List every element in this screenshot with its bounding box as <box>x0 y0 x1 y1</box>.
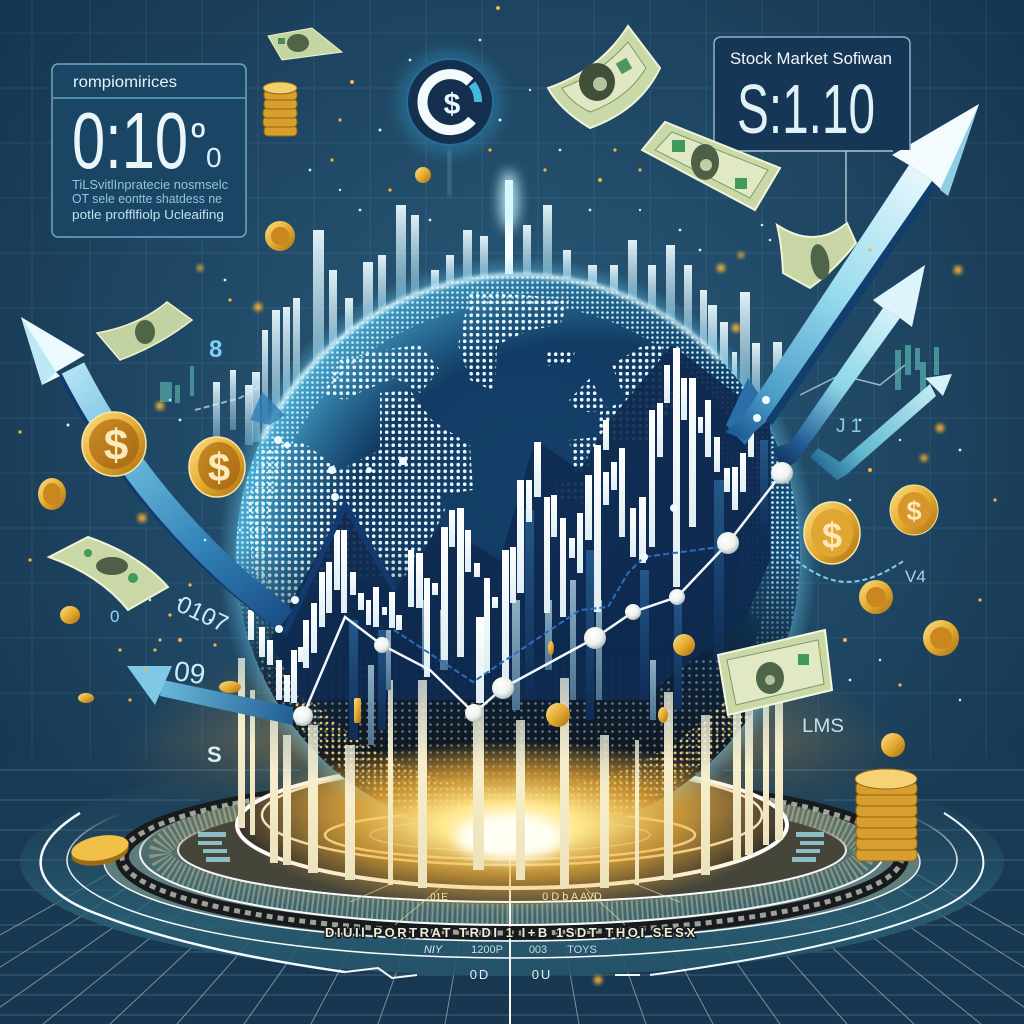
bill 4 <box>777 223 856 288</box>
arrow: large right <box>725 104 979 440</box>
small coins <box>60 167 905 757</box>
arrow: second right <box>772 265 925 470</box>
floor spark <box>594 976 602 984</box>
panel body text: TiLSvitlInpratecie nosmselc <box>72 178 228 192</box>
coin 2: $ <box>208 446 230 490</box>
left figure: 8 <box>209 336 222 363</box>
coin 4 <box>265 221 295 251</box>
globe rim dots <box>236 274 800 838</box>
arrow: third right <box>810 374 952 480</box>
coin 1 left large: $ <box>104 421 128 470</box>
coin 8 <box>859 580 893 614</box>
globe left crescent <box>236 274 800 838</box>
globe rim light <box>262 275 720 440</box>
globe lower gold dots <box>285 695 751 838</box>
small zero: 0 <box>206 142 222 173</box>
code label: 003 <box>529 944 547 956</box>
metric value: 0:10 <box>72 96 188 185</box>
chart backdrop <box>270 345 770 700</box>
continents <box>248 292 795 620</box>
icon: circular logo <box>396 48 504 196</box>
bill 5 left <box>97 302 192 360</box>
back bar chart <box>213 180 782 445</box>
left code one: 0107 <box>172 591 232 638</box>
right label: V4 <box>905 567 926 586</box>
logo beam <box>448 150 451 196</box>
scale value right: 0U <box>532 967 552 982</box>
coin 1 left large <box>82 412 146 476</box>
left background mini chart <box>160 366 262 410</box>
bill 6 left lower <box>49 537 168 610</box>
navy candlesticks <box>349 440 768 740</box>
panel: stock market software <box>714 37 910 222</box>
coin 6: $ <box>906 496 922 526</box>
bill 7 lower right <box>718 630 832 715</box>
data points <box>293 462 793 726</box>
coin 5 right large <box>804 502 860 564</box>
coin 5 right large: $ <box>822 515 842 556</box>
platform ring labels <box>325 891 695 982</box>
degree mark: o <box>191 113 205 143</box>
bill 1 top small <box>268 28 342 60</box>
coin 2 <box>189 437 245 497</box>
arrow: lower left <box>127 666 293 725</box>
metric value: S:1.10 <box>737 70 875 148</box>
globe lower dots <box>256 660 780 838</box>
floating labels <box>110 336 926 767</box>
right background mini chart <box>800 345 939 395</box>
blue dashed trend <box>394 547 719 682</box>
scale value left: 0D <box>470 967 490 982</box>
gold haze behind platform <box>112 610 912 950</box>
toys label: TOYS <box>567 944 597 956</box>
pointer marks on floor <box>345 968 640 978</box>
right small label: J 1 <box>836 416 861 437</box>
icon: circular logo: $ <box>444 88 461 121</box>
left zero: 0 <box>110 607 119 626</box>
coin 6 <box>890 485 938 535</box>
arrow: large left down arrow <box>21 317 395 632</box>
ring label left: 01E <box>430 892 448 903</box>
navy diamond right <box>726 378 770 445</box>
dotted curve right <box>790 555 905 582</box>
platform floor <box>0 740 1024 1024</box>
coin 3 <box>38 478 66 510</box>
base glow <box>240 740 780 910</box>
side scale ticks left <box>198 832 230 862</box>
left dollar label: S <box>207 742 222 767</box>
coin 7 <box>923 620 959 656</box>
panel body text <box>72 178 228 222</box>
coin on platform <box>69 831 131 870</box>
bill 3 <box>642 122 780 210</box>
coin stack top left <box>263 82 297 136</box>
ring label right: 0 D b A AVD <box>542 891 602 903</box>
navy diamond left <box>250 392 285 425</box>
line chart <box>274 396 793 726</box>
left code two: 09 <box>172 655 207 690</box>
globe <box>218 256 818 856</box>
panel heading: Stock Market Sofiwan <box>730 49 892 68</box>
small white nodes <box>274 396 770 633</box>
row two labels: NIY <box>424 944 443 956</box>
lower right label: LMS <box>802 716 844 737</box>
globe lower shading <box>236 274 800 838</box>
panel body text: OT sele eontte shatdess ne <box>72 192 222 206</box>
panel heading: rompiomirices <box>73 74 177 91</box>
ring text band: DIUIl PORTRAT TRDI 1 I+B 1SDT THOI SESX <box>325 925 695 940</box>
panel: left metric <box>52 64 246 237</box>
outer ring disc <box>20 748 1004 976</box>
coin stack right <box>855 769 917 861</box>
top bar glow <box>499 170 519 230</box>
white candlesticks <box>248 348 754 703</box>
panel body text: potle profflfiolp Ucleaifing <box>72 208 224 222</box>
lower cream bars <box>238 658 783 888</box>
side scale ticks right <box>792 832 824 862</box>
sparkle particles <box>18 6 997 702</box>
resolution label: 1200P <box>471 944 503 956</box>
blue particles <box>66 39 961 701</box>
globe halo <box>218 256 818 856</box>
bill 2 top curved <box>548 26 660 128</box>
slate candlesticks <box>368 580 656 745</box>
glowing gold orbs <box>138 252 962 522</box>
